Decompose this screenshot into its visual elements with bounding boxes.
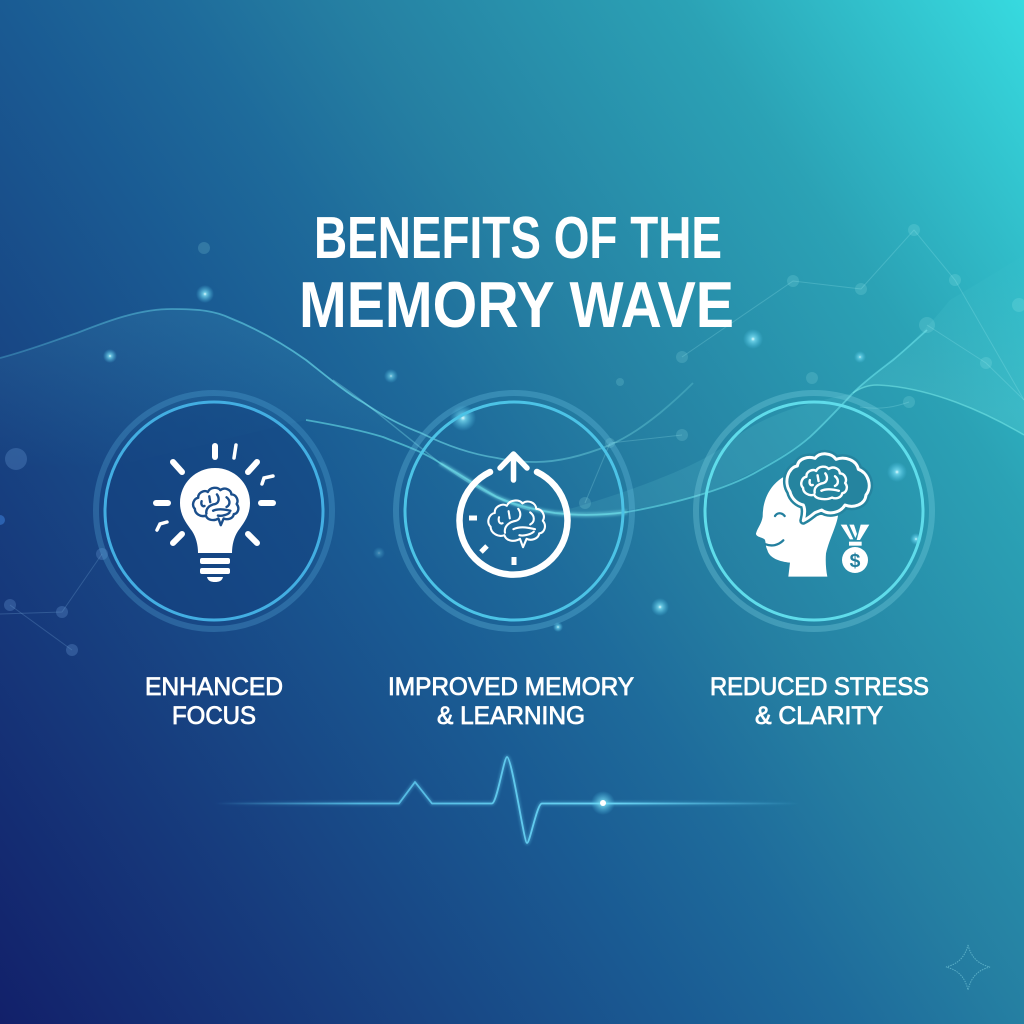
label: enhanced focus: ENHANCED bbox=[145, 673, 283, 701]
icon: thought cloud with brain bbox=[787, 454, 869, 521]
ring frame: stress bbox=[696, 393, 932, 629]
glowing particles bbox=[0, 285, 922, 632]
icon: head with thought cloud and medal bbox=[756, 454, 869, 577]
flowing wave ribbons bbox=[0, 255, 1024, 515]
panel: reduced stress and clarity bbox=[696, 393, 932, 730]
icon: clock arrow with brain bbox=[459, 454, 568, 575]
panel: improved memory and learning bbox=[388, 393, 634, 730]
title bbox=[299, 205, 734, 341]
label: reduced stress and clarity bbox=[710, 673, 929, 730]
icon: medal with dollar sign: $ bbox=[850, 551, 861, 572]
label: enhanced focus: FOCUS bbox=[172, 702, 256, 730]
network nodes: upper right bbox=[198, 224, 1024, 509]
icon: brain outline bbox=[488, 500, 545, 547]
icon: head silhouette bbox=[756, 477, 838, 577]
ring frame: focus bbox=[96, 393, 332, 629]
panel: enhanced focus bbox=[96, 393, 332, 730]
label: enhanced focus bbox=[145, 673, 283, 730]
label: reduced stress and clarity: REDUCED STRESS bbox=[710, 673, 929, 701]
decorative star outline bbox=[946, 945, 990, 990]
title: MEMORY WAVE bbox=[299, 268, 734, 341]
label: improved memory and learning: & LEARNING bbox=[437, 702, 585, 730]
icon: brain in bulb bbox=[193, 488, 238, 525]
title: BENEFITS OF THE bbox=[314, 205, 722, 271]
heartbeat line bbox=[215, 757, 800, 843]
ring frame: memory bbox=[396, 393, 632, 629]
network nodes: lower left bbox=[0, 448, 108, 656]
label: improved memory and learning bbox=[388, 673, 634, 730]
icon: light bulb with brain bbox=[156, 445, 273, 582]
label: reduced stress and clarity: & CLARITY bbox=[755, 702, 883, 730]
label: improved memory and learning: IMPROVED MEMORY bbox=[388, 673, 634, 701]
